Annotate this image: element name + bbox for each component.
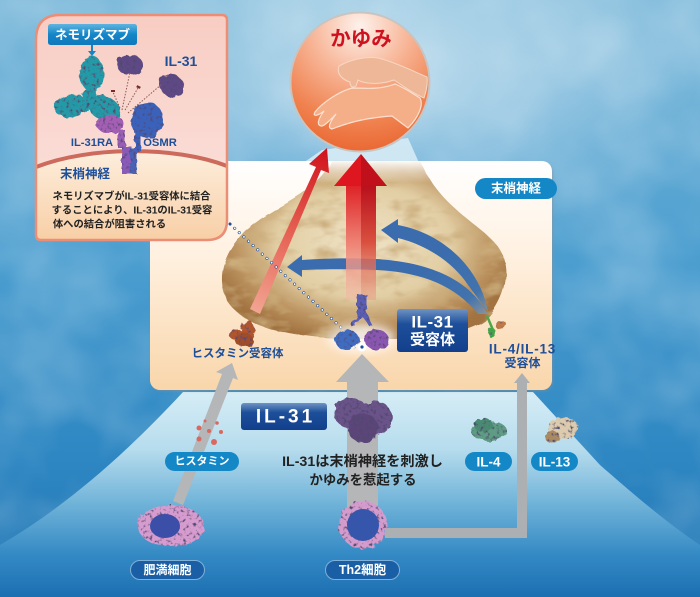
- icon: OSMR receptor: [130, 102, 163, 174]
- icon: IL-31 receptor: [328, 294, 396, 352]
- circle: itch with scratching hand: [290, 12, 430, 152]
- icon: upper hand: [338, 57, 427, 98]
- label: IL-4: [465, 452, 512, 471]
- icon: mast cell: [138, 505, 204, 547]
- light mountain shape: [0, 138, 700, 597]
- blue arrow: lower curve: [287, 255, 488, 314]
- icon: IL-13 molecule: [545, 417, 578, 443]
- gray arrow: IL-4/IL-13: [385, 373, 530, 538]
- label: IL-31RA: IL-31RA: [71, 137, 113, 149]
- inset panel: nemolizumab mechanism: [36, 15, 227, 240]
- label: IL-31 inset: IL-31: [165, 53, 198, 69]
- text: inset description: することにより、IL-31のIL-31受容: [52, 204, 213, 216]
- panel: peripheral nerve: [150, 148, 557, 391]
- label: IL-13: [531, 452, 578, 471]
- label: IL-13: IL-13: [539, 454, 571, 470]
- label: OSMR: OSMR: [143, 137, 177, 149]
- label: IL-4/IL-13 receptor: 受容体: [504, 355, 541, 370]
- text: IL-31 description: かゆみを惹起する: [309, 472, 417, 488]
- label: IL-31: [241, 403, 327, 430]
- label: IL-4/IL-13 receptor: IL-4/IL-13: [489, 342, 556, 356]
- icon: IL-31RA receptor: [96, 115, 131, 174]
- icon: IL-31 molecule: [334, 398, 392, 443]
- label: IL-4: IL-4: [476, 454, 501, 470]
- label: peripheral nerve inset: 末梢神経: [60, 166, 110, 181]
- label: nemolizumab: ネモリズマブ: [55, 27, 130, 42]
- title: itch: かゆみ: [330, 28, 392, 50]
- text: inset description: 体への結合が阻害される: [53, 218, 166, 230]
- label: histamine: ヒスタミン: [174, 454, 230, 468]
- icon: IL-4 molecule: [471, 418, 507, 441]
- label: nemolizumab: [48, 24, 137, 45]
- dotted arrows: blocked binding: [113, 72, 162, 113]
- gray arrow: IL-31: [336, 354, 389, 510]
- text: inset description: [52, 190, 213, 230]
- label: IL-31: IL-31: [256, 406, 315, 428]
- text: inset description: ネモリズマブがIL-31受容体に結合: [53, 190, 211, 202]
- nerve ending shape: [222, 160, 506, 339]
- arrow: label to antibody: [88, 45, 96, 56]
- icon: histamine particles: [196, 420, 223, 445]
- text: IL-31 description: [282, 453, 443, 488]
- text: IL-31 description: IL-31は末梢神経を刺激し: [282, 453, 443, 470]
- label: Th2 cell: [326, 560, 400, 580]
- label: IL-31 receptor: [397, 309, 468, 352]
- label: peripheral nerve: 末梢神経: [491, 180, 541, 196]
- label: peripheral nerve: [475, 178, 557, 199]
- label: mast cell: [130, 560, 204, 580]
- icon: lower hand: [314, 84, 421, 129]
- icon: histamine receptor: [229, 320, 255, 347]
- red arrow: histamine signal: [250, 148, 329, 314]
- icon: free IL-31 molecules: [117, 55, 189, 102]
- label: IL-31 receptor: 受容体: [410, 330, 455, 348]
- label: histamine receptor: ヒスタミン受容体: [192, 346, 284, 360]
- label: mast cell: 肥満細胞: [143, 562, 192, 577]
- icon: Th2 cell: [339, 501, 387, 549]
- label: IL-31 receptor: IL-31: [411, 312, 454, 332]
- label: histamine: [165, 452, 239, 471]
- red arrow: IL-31 signal: [334, 154, 387, 300]
- icon: IL-4/IL-13 receptor: [487, 316, 507, 338]
- label: IL-4/IL-13 receptor: [489, 342, 556, 370]
- dotted line: [230, 224, 362, 347]
- blue arrow: upper curve: [381, 219, 488, 312]
- icon: nemolizumab antibody: [52, 56, 124, 126]
- label: Th2 cell: Th2細胞: [339, 562, 387, 577]
- gray arrow: histamine: [173, 363, 238, 505]
